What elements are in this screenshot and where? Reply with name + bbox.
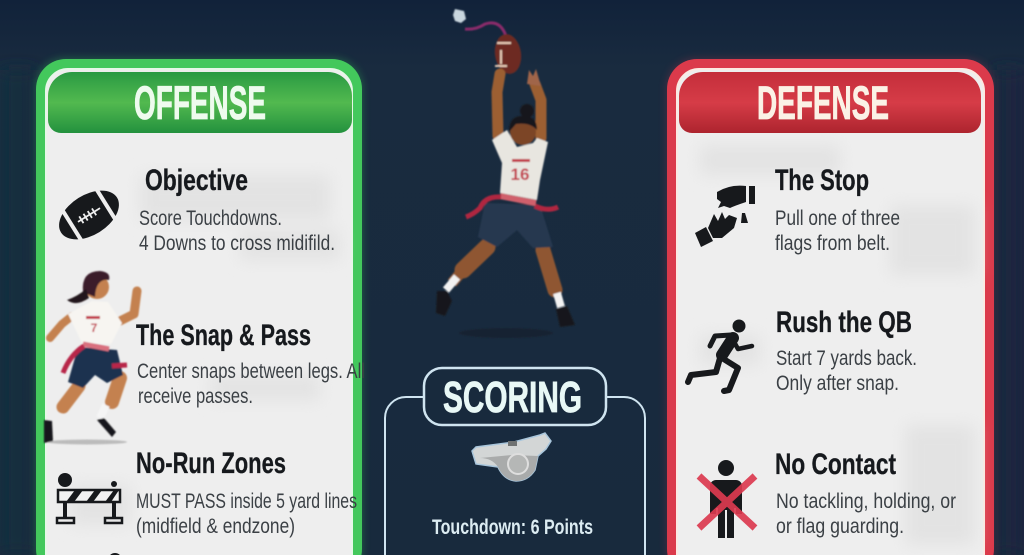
- text: objective: Objective: [145, 164, 248, 197]
- icon: no contact: [699, 460, 755, 538]
- text: the stop: The Stop: [775, 164, 869, 197]
- figure: jumping receiver: [436, 9, 575, 338]
- icon: football: [50, 181, 128, 249]
- panel: defense: [666, 58, 995, 555]
- icon: whistle: [472, 433, 551, 481]
- title: offense: OFFENSE: [134, 76, 266, 129]
- panel: offense: [35, 58, 365, 555]
- icon: runner: [688, 320, 752, 391]
- text: the stop: Pull one of three: [775, 207, 900, 230]
- text: no contact: or flag guarding.: [776, 515, 904, 538]
- text: snap and pass: The Snap & Pass: [136, 319, 311, 352]
- text: no-run zones: (midfield & endzone): [136, 515, 295, 538]
- text: no contact: [775, 448, 956, 538]
- text: no contact: No tackling, holding, or: [776, 490, 956, 513]
- text: no contact: No Contact: [775, 448, 896, 481]
- text: objective: 4 Downs to cross midifild.: [139, 232, 335, 255]
- heading: scoring: [424, 368, 606, 425]
- heading: scoring: SCORING: [443, 373, 582, 422]
- text: rush the qb: [776, 306, 917, 395]
- title: defense: DEFENSE: [757, 76, 889, 129]
- figure: offense player: 7: [91, 321, 98, 335]
- figure: jumping receiver: 16: [511, 165, 529, 184]
- text: snap and pass: Center snaps between legs. All: [137, 360, 365, 383]
- text: snap and pass: receive passes.: [138, 385, 253, 408]
- header: offense: [48, 72, 352, 133]
- header: defense: [679, 72, 981, 133]
- text: snap and pass: [136, 319, 365, 408]
- text: objective: [139, 164, 335, 255]
- icon: flag pull hands: [695, 186, 755, 247]
- figure: offense player: [44, 271, 137, 444]
- text: the stop: flags from belt.: [775, 232, 890, 255]
- panel: scoring: [385, 368, 645, 555]
- text: the stop: [775, 164, 900, 255]
- text: no-run zones: No-Run Zones: [136, 447, 286, 480]
- text: no-run zones: [136, 447, 357, 538]
- icon: barrier: [57, 473, 122, 523]
- text: no-run zones: MUST PASS inside 5 yard lines: [136, 490, 357, 513]
- text: objective: Score Touchdowns.: [139, 207, 282, 230]
- text: touchdown points: Touchdown: 6 Points: [432, 516, 593, 539]
- text: rush the qb: Rush the QB: [776, 306, 912, 339]
- text: rush the qb: Only after snap.: [776, 372, 899, 395]
- text: rush the qb: Start 7 yards back.: [776, 347, 917, 370]
